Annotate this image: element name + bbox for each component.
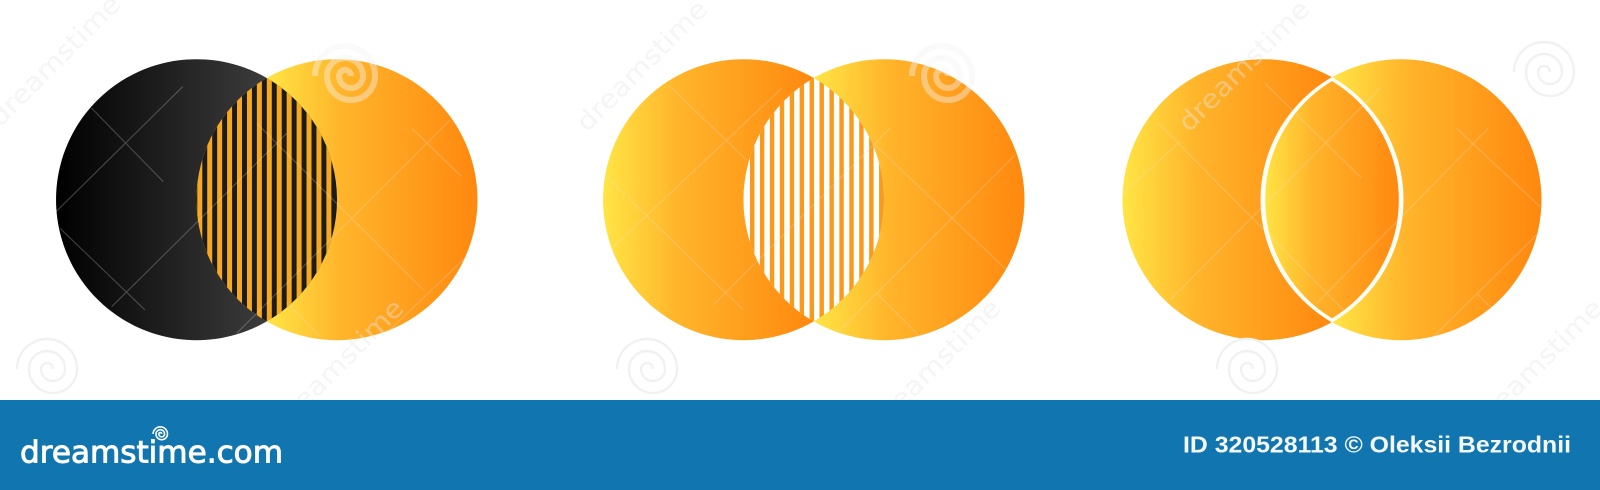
panel: black and orange circles with striped overlap bbox=[56, 59, 477, 340]
gradient overlap with white outline bbox=[1263, 79, 1401, 320]
footer banner bbox=[0, 400, 1600, 490]
orange right crescent bbox=[814, 59, 1024, 340]
watermark spirals on white bbox=[17, 42, 1574, 393]
watermark text: dreamstime bbox=[1173, 0, 1316, 138]
striped black and orange overlap bbox=[196, 78, 338, 322]
watermark spirals on circles bbox=[315, 46, 972, 100]
watermark lines bbox=[56, 83, 1540, 337]
image ID and credit: ID 320528113 © Oleksii Bezrodnii bbox=[1183, 432, 1571, 458]
panel: two orange circles with white striped overlap bbox=[603, 59, 1024, 340]
watermark text: dreamstime bbox=[571, 0, 714, 138]
watermark text: dreamstime bbox=[267, 293, 410, 437]
orange right crescent bbox=[1332, 59, 1541, 340]
orange left crescent bbox=[603, 59, 814, 340]
watermark text: dreamstime bbox=[864, 293, 1007, 437]
dreamstime logo text: dreamstime.com bbox=[20, 436, 283, 470]
black left crescent bbox=[56, 59, 267, 340]
watermark text: dreamstime bbox=[1466, 293, 1600, 437]
logo spiral icon bbox=[153, 427, 167, 440]
orange left crescent bbox=[1123, 59, 1332, 340]
orange right crescent bbox=[267, 59, 477, 340]
striped white and orange overlap bbox=[743, 78, 884, 322]
panel: two orange circles with outlined overlap bbox=[1123, 59, 1541, 340]
